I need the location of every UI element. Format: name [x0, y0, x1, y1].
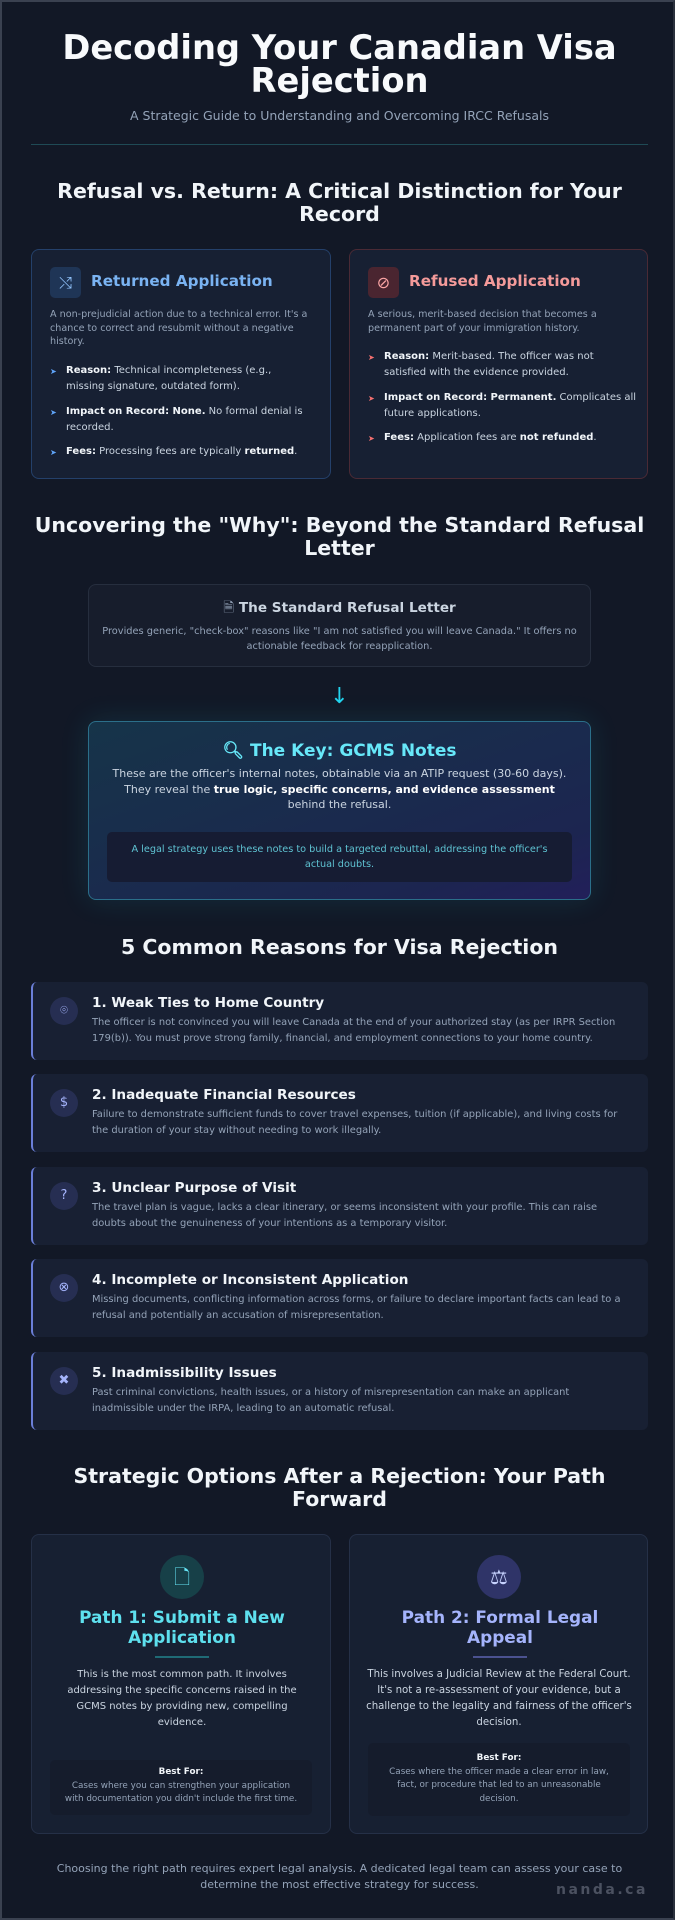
text: refused desc: A serious, merit-based decision that becomes a permanent part of your immigration history. — [368, 309, 597, 334]
panel: refused application — [349, 249, 648, 479]
heading: uncovering why: Uncovering the "Why": Beyond the Standard Refusal Letter — [35, 513, 644, 560]
item: incomplete: refusal and potentially an accusation of misrepresentation. — [92, 1310, 384, 1321]
item: purpose — [31, 1167, 648, 1245]
text: GCMS desc: These are the officer's internal notes, obtainable via an ATIP request (30-60 days). — [113, 767, 566, 780]
icon: returned: ⤭ — [59, 273, 72, 292]
item: incomplete: Missing documents, conflicting information across forms, or failure to declare important facts can lead to a — [92, 1294, 621, 1305]
item: purpose: doubts about the genuineness of your intentions as a temporary visitor. — [92, 1218, 447, 1229]
icon: refused — [368, 267, 399, 298]
callout: path 2 best for: Best For: — [477, 1753, 521, 1763]
text: path 1 desc: This is the most common path. It involves addressing the specific concerns raised in the GCMS notes by providing new, compelling evidence. — [67, 1669, 297, 1728]
item: purpose: 3. Unclear Purpose of Visit — [92, 1180, 296, 1196]
heading: path 2: Path 2: Formal Legal Appeal — [402, 1607, 598, 1647]
text: GCMS desc: They reveal the true logic, specific concerns, and evidence assessment — [124, 782, 555, 796]
item: purpose: ? — [61, 1188, 67, 1203]
icon: scales — [477, 1555, 521, 1599]
item: incomplete — [31, 1259, 648, 1337]
item: financial: the duration of your stay without needing to work illegally. — [92, 1125, 381, 1136]
panel: path 1 — [31, 1534, 331, 1834]
arrow: down: ↓ — [330, 684, 349, 709]
item: incomplete: ⊗ — [59, 1280, 69, 1295]
text: returned desc: A non-prejudicial action due to a technical error. It's a — [50, 309, 307, 320]
item: financial: 2. Inadequate Financial Resources — [92, 1087, 356, 1103]
heading: GCMS: 🔍︎ The Key: GCMS Notes — [222, 741, 457, 761]
heading: refusal vs return: Refusal vs. Return: A Critical Distinction for Your Record — [57, 179, 622, 226]
item: inadmissibility — [31, 1352, 648, 1430]
callout: path 1 best for: Best For: — [159, 1767, 203, 1777]
title: Decoding Your Canadian Visa Rejection — [62, 28, 617, 100]
heading: strategic options: Strategic Options After a Rejection: Your Path Forward — [73, 1464, 606, 1511]
callout: path 2 best for: Cases where the officer made a clear error in law, fact, or procedure that led to an unreasonable decision. — [389, 1766, 609, 1804]
text: standard letter desc: Provides generic, "check-box" reasons like "I am not satisfied you will leave Canada." It offers no actionable feedback for reapplication. — [102, 626, 577, 652]
list: returned points — [51, 365, 303, 457]
icon: returned — [50, 267, 81, 298]
text: returned desc — [50, 309, 307, 347]
list: refused points — [368, 351, 636, 443]
panel: returned application — [31, 249, 331, 479]
icon: new file — [160, 1555, 204, 1599]
callout: legal strategy: A legal strategy uses these notes to build a targeted rebuttal, addressing the officer's actual doubts. — [131, 844, 548, 870]
list: refused points: Impact on Record: Permanent. Complicates all future applications. — [384, 392, 636, 418]
text: returned desc: history. — [50, 336, 85, 347]
heading: returned: Returned Application — [91, 272, 273, 290]
list: returned points: Fees: Processing fees are typically returned. — [66, 446, 297, 457]
heading: 5 reasons: 5 Common Reasons for Visa Rejection — [121, 935, 558, 959]
item: incomplete: 4. Incomplete or Inconsistent Application — [92, 1272, 408, 1288]
list: returned points: Impact on Record: None. No formal denial is recorded. — [66, 406, 303, 432]
item: financial: $ — [60, 1095, 68, 1110]
item: inadmissibility: 5. Inadmissibility Issues — [92, 1365, 277, 1381]
panel: standard refusal letter — [88, 584, 591, 667]
text: GCMS desc — [112, 767, 566, 811]
item: financial: Failure to demonstrate sufficient funds to cover travel expenses, tuition (if applicable), and living costs for — [92, 1109, 617, 1120]
item: inadmissibility: inadmissible under the IRPA, leading to an automatic refusal. — [92, 1403, 394, 1414]
item: weak ties — [31, 982, 648, 1060]
item: inadmissibility: Past criminal convictions, health issues, or a history of misrepresentation can make an applicant — [92, 1387, 569, 1398]
text: closing note: Choosing the right path requires expert legal analysis. A dedicated legal team can assess your case to determine the most effective strategy for success. — [57, 1862, 622, 1891]
icon: scales: ⚖ — [490, 1565, 508, 1589]
callout: path 1 best for: Cases where you can strengthen your application with documentation you didn't include the first time. — [65, 1780, 297, 1804]
item: weak ties: The officer is not convinced you will leave Canada at the end of your authorized stay (as per IRPR Section — [92, 1017, 615, 1028]
callout: path 1 best for — [50, 1760, 312, 1815]
list: returned points: Reason: Technical incompleteness (e.g., missing signature, outdated form). — [66, 365, 271, 392]
panel: path 2 — [349, 1534, 648, 1834]
subtitle: A Strategic Guide to Understanding and Overcoming IRCC Refusals — [130, 108, 549, 123]
heading: standard letter: 🗎 The Standard Refusal Letter — [223, 600, 456, 616]
watermark: nanda.ca: nanda.ca — [556, 1882, 648, 1898]
text: path 2 desc: This involves a Judicial Review at the Federal Court. It's not a re-assessment of your evidence, but a challenge to the legality and fairness of the officer's decision. — [366, 1669, 632, 1728]
list: refused points: Reason: Merit-based. The officer was not satisfied with the evidence provided. — [384, 351, 594, 378]
item: inadmissibility: ✖ — [59, 1373, 69, 1388]
item: weak ties: ⌾ — [60, 1003, 68, 1018]
text: returned desc: chance to correct and resubmit without a negative — [50, 322, 294, 334]
item: financial — [31, 1074, 648, 1152]
icon: new file: 🗋 — [174, 1565, 190, 1589]
heading: refused: Refused Application — [409, 272, 581, 290]
item: purpose: The travel plan is vague, lacks a clear itinerary, or seems inconsistent with your profile. This can raise — [92, 1202, 597, 1213]
callout: path 2 best for — [368, 1743, 630, 1816]
panel: GCMS notes — [88, 721, 591, 900]
item: weak ties: 179(b)). You must prove strong family, financial, and employment connections to your home country. — [92, 1033, 593, 1044]
callout: legal strategy — [107, 832, 572, 882]
item: weak ties: 1. Weak Ties to Home Country — [92, 995, 324, 1011]
list: refused points: Fees: Application fees are not refunded. — [384, 432, 597, 443]
text: GCMS desc: behind the refusal. — [288, 798, 391, 811]
heading: path 1: Path 1: Submit a New Application — [79, 1607, 285, 1647]
icon: refused: ⊘ — [377, 273, 390, 292]
